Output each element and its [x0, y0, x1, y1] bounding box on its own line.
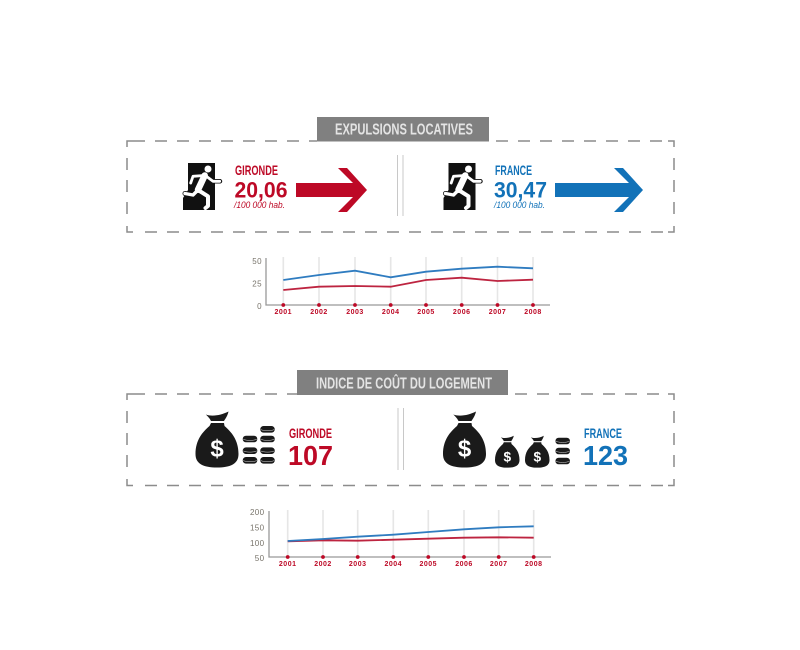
year labels: 2007 — [489, 309, 506, 316]
year labels: 2003 — [349, 561, 366, 568]
dashed panel frame — [127, 141, 674, 232]
line chart: cost index 2001-2008: 200 — [250, 508, 265, 517]
section: expulsions locatives — [127, 117, 674, 232]
year labels: 2004 — [382, 309, 399, 316]
series: Gironde — [288, 537, 534, 541]
year labels: 2007 — [490, 561, 507, 568]
stat: France expulsions: /100 000 hab. — [493, 200, 545, 210]
stat: France cost index: 123 — [583, 440, 628, 471]
stat: Gironde expulsions: 20,06 — [234, 178, 288, 202]
series: France — [288, 526, 534, 541]
heading: indice de coût du logement: INDICE DE COÛT DU LOGEMENT — [316, 374, 492, 392]
year labels: 2005 — [420, 561, 437, 568]
heading: indice de coût du logement — [297, 370, 508, 395]
year labels: 2008 — [525, 561, 542, 568]
year labels: 2001 — [275, 309, 292, 316]
central divider — [398, 155, 403, 216]
stat: France expulsions — [493, 162, 547, 210]
stat: Gironde cost index: 107 — [288, 440, 333, 471]
stat: France cost index — [583, 425, 628, 471]
icon: emergency exit, Gironde — [183, 163, 220, 210]
section: indice de coût du logement — [127, 370, 674, 486]
series: France — [283, 267, 533, 280]
year labels: 2006 — [453, 309, 470, 316]
line chart: expulsions 2001-2008: 0 — [257, 302, 262, 311]
year labels: 2002 — [310, 309, 328, 316]
stat: France cost index: FRANCE — [584, 425, 622, 441]
icon: money bag and coins, Gironde: $ — [210, 436, 224, 462]
line chart: cost index 2001-2008: 50 — [255, 554, 265, 563]
year labels: 2003 — [346, 309, 364, 316]
stat: Gironde expulsions — [233, 162, 288, 210]
dashed panel frame — [127, 394, 674, 486]
central divider — [398, 408, 404, 470]
year labels — [279, 561, 542, 568]
heading: expulsions locatives: EXPULSIONS LOCATIVES — [335, 122, 473, 138]
line chart: cost index 2001-2008 — [250, 508, 551, 568]
stat: Gironde cost index: GIRONDE — [289, 425, 332, 441]
year labels: 2001 — [279, 561, 296, 568]
stat: Gironde expulsions: GIRONDE — [235, 162, 278, 178]
year markers — [281, 303, 535, 307]
stat: France expulsions: FRANCE — [495, 162, 532, 178]
stat: France expulsions: 30,47 — [494, 178, 547, 202]
year labels: 2006 — [455, 561, 473, 568]
stat: Gironde expulsions: /100 000 hab. — [233, 200, 285, 210]
year labels: 2004 — [385, 561, 402, 568]
icon: money bag and coins, Gironde — [196, 412, 275, 468]
stat: Gironde cost index — [288, 425, 333, 471]
line chart: expulsions 2001-2008 — [252, 257, 550, 316]
line chart: expulsions 2001-2008: 25 — [252, 280, 262, 288]
series: Gironde — [283, 278, 533, 290]
year labels: 2002 — [314, 561, 332, 568]
icon: emergency exit, France — [444, 163, 480, 210]
line chart: cost index 2001-2008: 100 — [250, 539, 265, 548]
icon: money bags and coins, France — [443, 412, 570, 468]
year markers — [286, 555, 536, 559]
year labels: 2005 — [417, 309, 435, 316]
arrow: Gironde — [296, 168, 367, 212]
line chart: expulsions 2001-2008: 50 — [252, 257, 262, 266]
line chart: cost index 2001-2008: 150 — [250, 524, 265, 532]
heading: expulsions locatives — [317, 117, 489, 142]
year labels — [275, 309, 542, 316]
year labels: 2008 — [524, 309, 542, 316]
icon: money bags and coins, France: $ — [458, 436, 472, 462]
icon: money bags and coins, France: $ — [533, 449, 541, 464]
icon: money bags and coins, France: $ — [503, 449, 511, 464]
arrow: France — [555, 168, 643, 212]
